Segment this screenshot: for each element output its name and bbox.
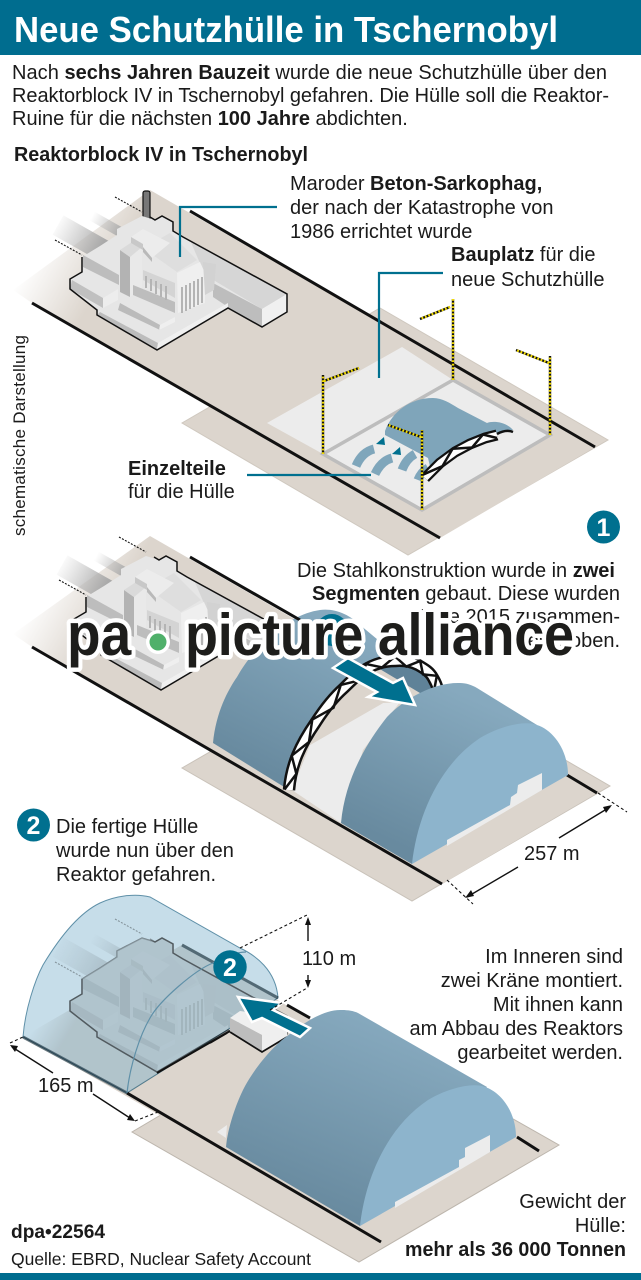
header bar: [0, 0, 641, 55]
label: step two: wurde nun über den: [55, 840, 234, 862]
step badge 1: 1: [597, 514, 611, 542]
road lines: [32, 211, 595, 538]
transparent hull front arch: [127, 952, 246, 1093]
label: parts: Einzelteile: [128, 458, 226, 480]
label: weight: Gewicht der: [519, 1191, 626, 1213]
label: site: [451, 244, 604, 291]
label: weight: Hülle:: [575, 1215, 626, 1237]
steel arch segment: [423, 431, 513, 478]
intro text: Ruine für die nächsten 100 Jahre abdichten.: [12, 108, 408, 130]
hull parts: [356, 437, 428, 480]
label: step one: Ende 2015 zusammen-: [413, 606, 620, 628]
leader line: site: [379, 273, 443, 378]
hull floor: [23, 945, 278, 1093]
step badge 2: 2: [27, 812, 40, 840]
label: step one: [297, 560, 620, 652]
dimension: width 165 m: 165 m: [38, 1075, 94, 1097]
transparent hull side: [23, 895, 278, 1093]
dimension: height 110 m: 110 m: [302, 948, 356, 970]
step badge 2: 2: [223, 954, 237, 982]
road lines: [127, 1005, 539, 1242]
hull opening: [395, 1135, 490, 1208]
reactor wing outside hull: [210, 1011, 287, 1052]
plate: [132, 1015, 559, 1262]
big hull side: [226, 1010, 487, 1226]
label: cranes: zwei Kräne montiert.: [441, 970, 623, 992]
platform remnant: [217, 1125, 227, 1138]
icon: chimney: [143, 191, 150, 229]
light construction zone: [267, 347, 453, 454]
road band: [13, 190, 595, 538]
label: sarcophagus: [290, 173, 554, 243]
hull segment under construction: [385, 398, 513, 475]
label: sarcophagus: der nach der Katastrophe von: [290, 197, 554, 219]
label: sarcophagus: 1986 errichtet wurde: [290, 221, 472, 243]
beige wedge: [310, 668, 440, 745]
dimension: length 257 m: 257 m: [524, 843, 580, 865]
dashed guides: [10, 915, 307, 1121]
label: cranes: [410, 946, 623, 1064]
label: parts: für die Hülle: [128, 481, 235, 503]
label: weight: mehr als 36 000 Tonnen: [405, 1239, 626, 1261]
label: cranes: Im Inneren sind: [485, 946, 623, 968]
vertical note: schematische Darstellung: [10, 335, 29, 536]
back hull: [213, 610, 395, 790]
panel: step one segments: [13, 536, 610, 901]
steel arch: [284, 656, 438, 790]
intro text: [12, 62, 609, 130]
big hull face: [360, 1085, 516, 1226]
label: weight: [405, 1191, 626, 1261]
label: cranes: Mit ihnen kann: [493, 994, 623, 1016]
panel: final position: [10, 895, 559, 1262]
road band: [13, 536, 597, 884]
intro text: Nach sechs Jahren Bauzeit wurde die neue Schutzhülle über den: [12, 62, 607, 84]
label: step two: Reaktor gefahren.: [56, 864, 216, 886]
label: step one: Segmenten gebaut. Diese wurden: [312, 583, 620, 605]
building silhouette inside hull: [70, 938, 287, 1072]
arrow: [333, 658, 415, 705]
reactor building: [55, 919, 287, 1072]
label: cranes: gearbeitet werden.: [457, 1042, 623, 1064]
road lines: [32, 557, 597, 884]
step badge 2: [213, 950, 247, 984]
label: step two: Die fertige Hülle: [56, 816, 198, 838]
panel: construction site: [13, 190, 608, 555]
construction plate: [182, 308, 608, 555]
label: step two: [55, 816, 234, 886]
hidden badge: [316, 614, 348, 646]
label: cranes: am Abbau des Reaktors: [410, 1018, 623, 1040]
label: step one: Die Stahlkonstruktion wurde in zwei: [297, 560, 615, 582]
leader line: parts: [247, 474, 371, 476]
front hull side: [341, 683, 537, 864]
white strip: [292, 702, 400, 823]
intro text: Reaktorblock IV in Tschernobyl gefahren. Die Hülle soll die Reaktor-: [12, 85, 609, 107]
cranes: [323, 299, 550, 510]
dimension: length 257 m: [447, 793, 627, 904]
arrow: [238, 997, 310, 1037]
step badge 2: [17, 808, 50, 842]
reactor building: [59, 537, 291, 690]
road band: [23, 945, 539, 1242]
agency credit: dpa•22564: [11, 1221, 105, 1243]
watermark: pa: [67, 602, 132, 669]
leader line: sarcophagus: [180, 207, 277, 257]
dimension: height 110 m: [302, 917, 356, 988]
bottom bar: [0, 1273, 641, 1280]
source: Quelle: EBRD, Nuclear Safety Account: [11, 1249, 311, 1269]
title: Neue Schutzhülle in Tschernobyl: [14, 9, 558, 50]
hull opening: [447, 773, 542, 846]
plate: [182, 653, 610, 901]
label: parts: [128, 458, 235, 503]
label: site: neue Schutzhülle: [451, 269, 604, 291]
section heading: Reaktorblock IV in Tschernobyl: [14, 144, 308, 166]
front hull face: [412, 723, 568, 864]
watermark: picture alliance: [185, 603, 574, 669]
dimension: width 165 m: [10, 1045, 135, 1121]
label: step one: geschoben.: [517, 630, 620, 652]
label: sarcophagus: Maroder Beton-Sarkophag,: [290, 173, 542, 195]
label: site: Bauplatz für die: [451, 244, 596, 266]
step badge 1: [587, 510, 620, 544]
site frame: [323, 380, 550, 510]
hull base edge: [157, 1031, 230, 1073]
road lines inside hull: [23, 945, 278, 1093]
back hull interior: [378, 663, 433, 695]
reactor building: [55, 197, 287, 350]
